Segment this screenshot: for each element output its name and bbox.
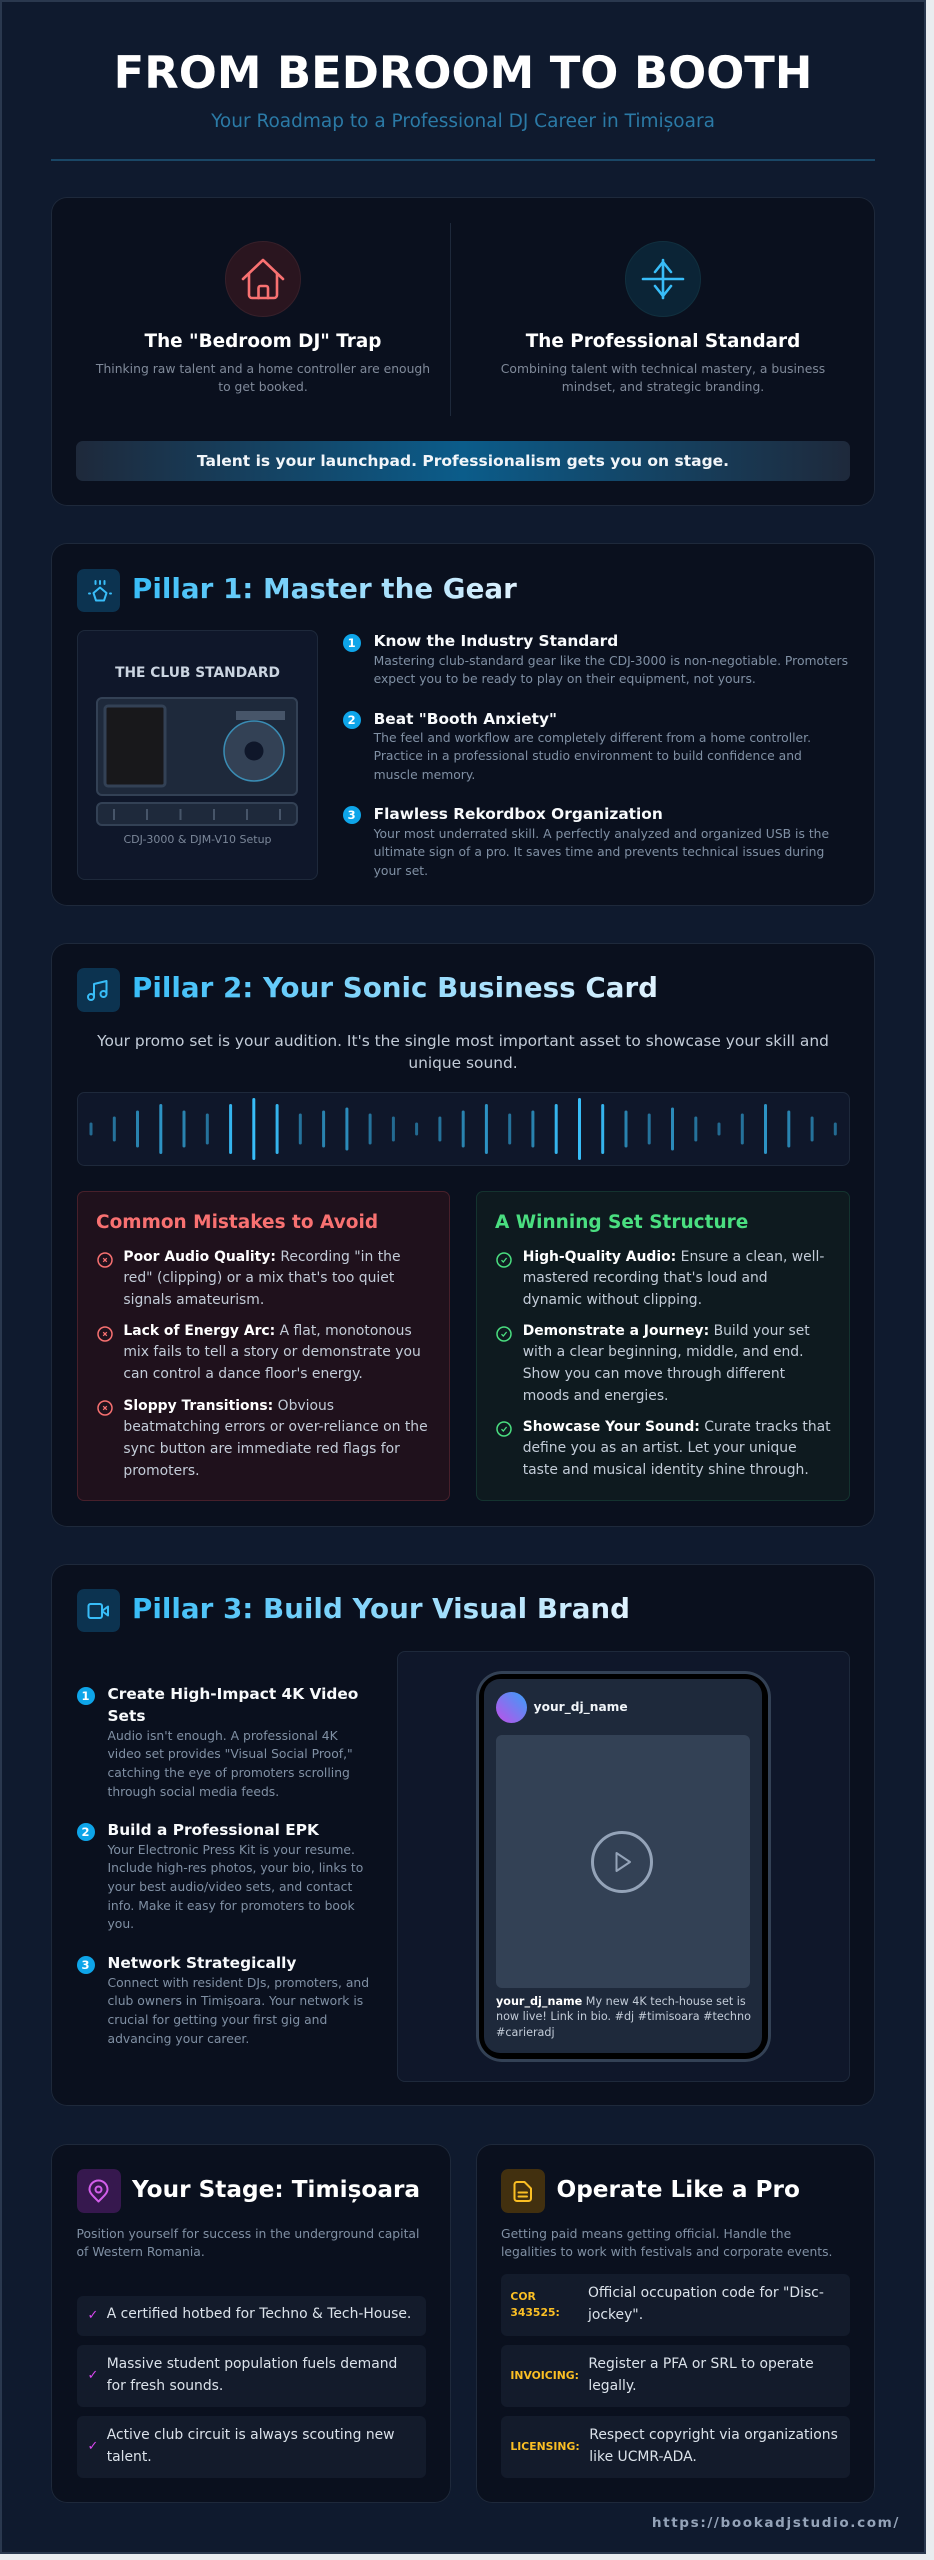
text: stage description: Position yourself for success in the underground capital (76, 2227, 419, 2241)
item 3: rekordbox: Your most underrated skill. A perfectly analyzed and organized USB is the (374, 827, 829, 841)
item 1: industry standard: Mastering club-standard gear like the CDJ-3000 is non-negotiable. Promoters (374, 654, 848, 668)
item 3: rekordbox: ultimate sign of a pro. It saves time and prevents technical issues during (374, 845, 824, 859)
panel: pillar 3 (51, 1564, 875, 2106)
row: invoicing: Register a PFA or SRL to operate (588, 2356, 814, 2372)
item 2: booth anxiety: Practice in a professional studio environment to build confidence and (374, 749, 802, 763)
item 1: industry standard: Know the Industry Standard (374, 632, 618, 650)
row: licensing (501, 2416, 850, 2478)
icon: x circle (97, 1326, 113, 1342)
icon: balance arrows (625, 241, 701, 317)
text: high quality audio (523, 1248, 824, 1308)
text: showcase sound: taste and musical identity shine through. (523, 1462, 809, 1478)
heading: winning set: A Winning Set Structure (495, 1212, 748, 1233)
post caption (496, 1995, 751, 2039)
item 3: network: advancing your career. (108, 2032, 249, 2046)
text: sloppy transitions: beatmatching errors or over-reliance on the (123, 1419, 428, 1435)
row: invoicing: INVOICING: (510, 2369, 579, 2382)
item 2: booth anxiety: Beat "Booth Anxiety" (374, 710, 557, 728)
icon: document (501, 2169, 545, 2213)
item 2: epk: Include high-res photos, your bio, links to (108, 1861, 363, 1875)
row: hotbed: ✓ (88, 2308, 98, 2322)
header divider (51, 159, 875, 161)
item 2: epk: 2 (81, 1825, 90, 1839)
text: promo intro (97, 1032, 829, 1072)
text: journey: Demonstrate a Journey: Build your set (523, 1322, 810, 1338)
heading: your stage: Your Stage: Timișoara (132, 2176, 420, 2203)
footer url: https://bookadjstudio.com/ (652, 2515, 900, 2531)
text: poor audio: red" (clipping) or a mix that's too quiet (123, 1270, 394, 1286)
row: club circuit: Active club circuit is always scouting new (107, 2427, 395, 2443)
profile name: your_dj_name (534, 1700, 628, 1714)
text: journey: Show you can move through different (523, 1366, 785, 1382)
heading: professional standard: The Professional Standard (526, 331, 800, 352)
heading: operate like a pro: Operate Like a Pro (556, 2176, 800, 2203)
title: FROM BEDROOM TO BOOTH (114, 46, 812, 99)
row: club circuit: ✓ (88, 2438, 98, 2454)
text: professional description (501, 362, 825, 394)
icon: cdj deck (96, 697, 298, 796)
icon: check circle (496, 1421, 512, 1437)
heading: common mistakes: Common Mistakes to Avoid (96, 1212, 378, 1233)
item 1: industry standard (343, 632, 848, 686)
text: showcase sound (523, 1418, 831, 1478)
caption: setup: CDJ-3000 & DJM-V10 Setup (123, 833, 272, 846)
text: energy arc (123, 1322, 421, 1382)
item 3: rekordbox: 3 (348, 808, 356, 822)
icon: play button (591, 1831, 653, 1893)
text: sloppy transitions: promoters. (123, 1463, 200, 1479)
post caption: now live! Link in bio. #dj #timisoara #techno (496, 2010, 751, 2023)
text: showcase sound: Showcase Your Sound: Curate tracks that (523, 1418, 831, 1434)
text: journey: moods and energies. (523, 1388, 668, 1404)
panel: pillar 1 (51, 543, 875, 906)
text: sloppy transitions: Sloppy Transitions: Obvious (123, 1398, 334, 1414)
icon: house (225, 241, 301, 317)
text: stage description: of Western Romania. (76, 2245, 205, 2259)
item 1: video sets: Audio isn't enough. A professional 4K (108, 1729, 338, 1743)
row: licensing: Respect copyright via organizations (589, 2427, 838, 2443)
item 2: epk: info. Make it easy for promoters to book (108, 1899, 355, 1913)
item 3: rekordbox (343, 805, 829, 878)
icon: x circle (97, 1400, 113, 1416)
text: poor audio (123, 1248, 400, 1308)
row: cor code: jockey". (588, 2306, 643, 2322)
panel: bedroom vs professional (51, 197, 875, 506)
text: promo intro: unique sound. (408, 1054, 518, 1072)
item 3: network (77, 1954, 369, 2046)
row: students (76, 2345, 426, 2407)
icon: check circle (496, 1326, 512, 1342)
item 2: epk (77, 1821, 363, 1931)
callout banner (76, 441, 850, 481)
item 3: rekordbox: Flawless Rekordbox Organization (374, 805, 663, 823)
text: professional description: Combining talent with technical mastery, a business (501, 362, 825, 376)
panel: your stage (51, 2144, 451, 2503)
panel: operate like a pro (476, 2144, 875, 2503)
text: energy arc: Lack of Energy Arc: A flat, monotonous (123, 1322, 412, 1338)
item 2: booth anxiety: 2 (348, 713, 356, 727)
text: journey: with a clear beginning, middle, and end. (523, 1344, 804, 1360)
text: showcase sound: define you as an artist. Let your unique (523, 1440, 797, 1456)
row: students: Massive student population fuels demand (107, 2356, 397, 2372)
text: sloppy transitions (123, 1398, 428, 1479)
chart: audio waveform (77, 1092, 850, 1166)
icon: music note (77, 968, 120, 1012)
panel: common mistakes (77, 1191, 450, 1501)
item 1: video sets: 1 (81, 1689, 90, 1703)
column divider (450, 223, 451, 416)
text: professional description: mindset, and strategic branding. (562, 380, 764, 394)
item 1: video sets: through social media feeds. (108, 1785, 279, 1799)
avatar (496, 1692, 527, 1722)
heading: pillar 1: Pillar 1: Master the Gear (132, 572, 517, 605)
post caption: your_dj_name My new 4K tech-house set is (496, 1995, 746, 2008)
item 2: epk: Your Electronic Press Kit is your resume. (108, 1843, 355, 1857)
text: sloppy transitions: sync button are immediate red flags for (123, 1441, 400, 1457)
icon: x circle (97, 1252, 113, 1268)
text: poor audio: signals amateurism. (123, 1292, 264, 1308)
post caption: #carieradj (496, 2026, 555, 2039)
item 1: industry standard: 1 (348, 636, 356, 650)
item 3: network: club owners in Timișoara. Your network is (108, 1994, 363, 2008)
item 3: network: crucial for getting your first gig and (108, 2013, 327, 2027)
row: club circuit (76, 2416, 426, 2478)
item 1: video sets (77, 1685, 358, 1799)
text: bedroom dj description: to get booked. (218, 380, 308, 394)
item 1: industry standard: expect you to be ready to play on their equipment, not yours. (374, 672, 756, 686)
item 2: epk: your best audio/video sets, and contact (108, 1880, 352, 1894)
item 1: video sets: video set provides "Visual Social Proof," (108, 1747, 353, 1761)
heading: pillar 3: Pillar 3: Build Your Visual Brand (132, 1592, 630, 1625)
item 2: epk: you. (108, 1917, 134, 1931)
item 3: network: 3 (81, 1958, 90, 1972)
heading: club standard: THE CLUB STANDARD (115, 665, 280, 681)
text: poor audio: Poor Audio Quality: Recording "in the (123, 1248, 400, 1264)
text: bedroom dj description: Thinking raw talent and a home controller are enough (96, 362, 430, 376)
callout banner: Talent is your launchpad. Professionalism gets you on stage. (197, 452, 729, 470)
panel: club standard (77, 630, 318, 880)
row: licensing: LICENSING: (510, 2440, 580, 2453)
row: cor code: COR (510, 2290, 536, 2303)
heading: pillar 2: Pillar 2: Your Sonic Business Card (132, 971, 658, 1004)
row: invoicing (501, 2345, 850, 2407)
text: promo intro: Your promo set is your audition. It's the single most important asset to showcase your skill and (97, 1032, 829, 1050)
item 3: network: Connect with resident DJs, promoters, and (108, 1976, 369, 1990)
icon: gear (77, 569, 120, 612)
icon: video camera (77, 1589, 120, 1632)
phone screen (484, 1679, 762, 2053)
row: hotbed: A certified hotbed for Techno & Tech-House. (107, 2306, 411, 2322)
text: high quality audio: dynamic without clipping. (523, 1292, 702, 1308)
heading: bedroom dj trap: The "Bedroom DJ" Trap (145, 331, 381, 352)
item 2: booth anxiety: muscle memory. (374, 768, 475, 782)
item 1: video sets: Sets (108, 1707, 145, 1725)
text: journey (523, 1322, 810, 1404)
icon: map pin (77, 2169, 121, 2213)
row: students: for fresh sounds. (107, 2378, 223, 2394)
row: cor code (501, 2274, 850, 2336)
text: operate description: legalities to work with festivals and corporate events. (501, 2245, 832, 2259)
item 3: network: Network Strategically (108, 1954, 296, 1972)
item 1: video sets: Create High-Impact 4K Video (108, 1685, 358, 1703)
row: cor code: 343525: (510, 2306, 560, 2319)
row: hotbed (76, 2296, 426, 2336)
subtitle: Your Roadmap to a Professional DJ Career in Timișoara (211, 111, 715, 132)
video placeholder (496, 1735, 750, 1988)
item 2: booth anxiety (343, 710, 811, 782)
item 3: rekordbox: your set. (374, 864, 428, 878)
row: students: ✓ (88, 2368, 98, 2382)
row: invoicing: legally. (588, 2378, 636, 2394)
icon: check circle (496, 1252, 512, 1268)
text: high quality audio: High-Quality Audio: Ensure a clean, well- (523, 1248, 824, 1264)
item 2: epk: Build a Professional EPK (108, 1821, 319, 1839)
row: licensing: like UCMR-ADA. (589, 2448, 697, 2464)
text: energy arc: can control a dance floor's energy. (123, 1366, 363, 1382)
panel: pillar 2 (51, 943, 875, 1527)
text: bedroom dj description (96, 362, 430, 394)
item 1: video sets: catching the eye of promoters scrolling (108, 1766, 350, 1780)
text: operate description (501, 2227, 832, 2259)
panel: winning set (476, 1191, 850, 1501)
icon: mixer strip (96, 802, 298, 826)
panel: phone mockup backdrop (397, 1651, 850, 2082)
text: stage description (76, 2227, 419, 2259)
text: energy arc: mix fails to tell a story or demonstrate you (123, 1344, 421, 1360)
row: club circuit: talent. (107, 2448, 152, 2464)
text: operate description: Getting paid means getting official. Handle the (501, 2227, 791, 2241)
item 2: booth anxiety: The feel and workflow are completely different from a home controller. (374, 731, 811, 745)
phone mockup (476, 1671, 771, 2062)
row: cor code: Official occupation code for "Disc- (588, 2285, 824, 2301)
text: high quality audio: mastered recording that's loud and (523, 1270, 768, 1286)
